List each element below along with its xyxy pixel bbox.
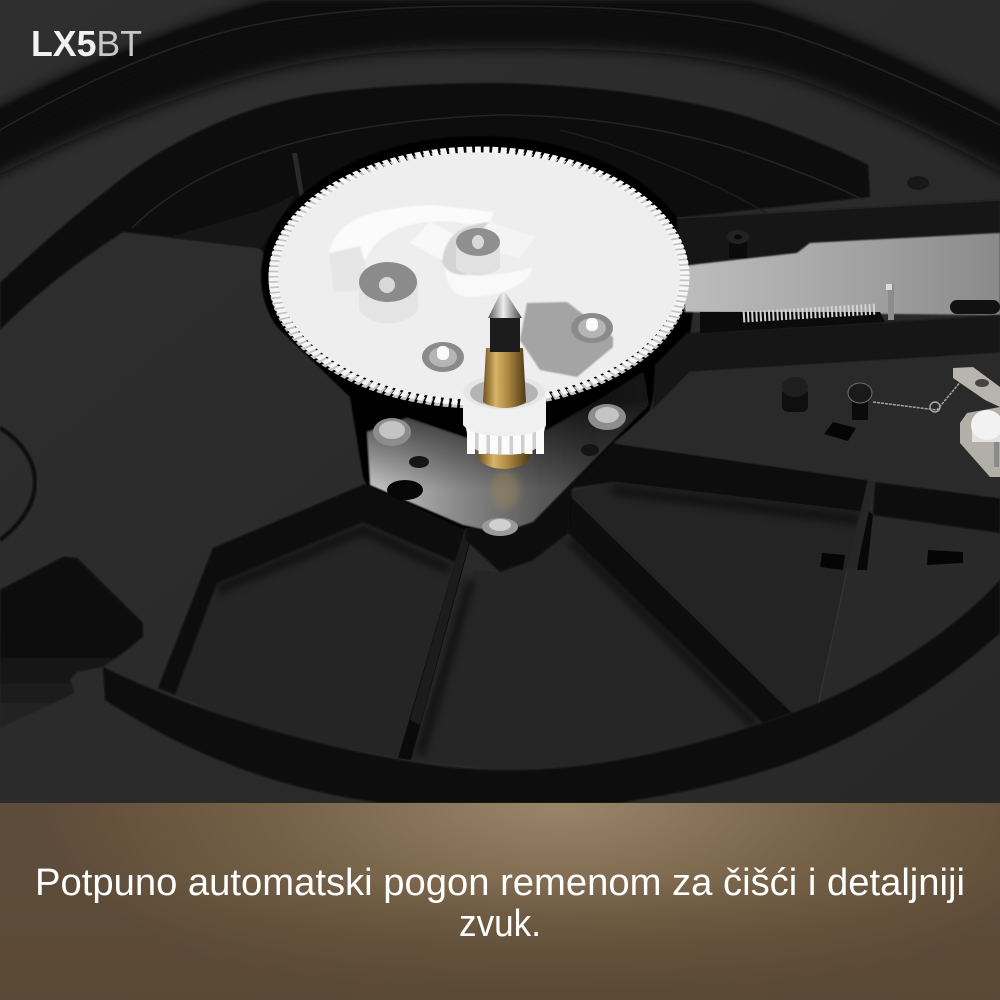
gear edge [274,153,684,405]
plate holes [387,444,599,500]
right floor panel [613,353,1000,498]
brass reflection on plate [491,470,519,510]
white cam arc [329,205,535,297]
metal tab [953,367,1000,407]
inner ring wall and well [0,83,870,330]
right mechanism parts [782,367,1000,477]
brass shaft [483,348,526,408]
metal mounting plate [367,373,648,536]
round boss outline at left edge [0,428,35,540]
diagonal rib [568,492,793,723]
steel tip [488,292,522,318]
left collar stud [422,342,464,372]
small post with wire [848,368,972,420]
upper right wall [677,200,1000,270]
black shaft [490,316,520,352]
gear teeth [274,150,684,402]
gold gradient background [0,803,1000,1000]
gear face [278,152,680,400]
lower right wall [652,315,1000,412]
pinion collar back [463,375,545,411]
large white gear [274,150,684,405]
small screw post on upper wall [727,230,749,258]
small floor slots [820,550,963,570]
bottom ring wall [103,580,1000,803]
left notch recess [0,557,143,728]
dome on gutter floor [907,176,929,190]
plate screws [373,404,626,536]
square slot [824,422,856,441]
spindle and pinion [463,292,546,469]
right floor walls [572,443,1000,710]
left screw boss [359,262,418,324]
caption text: Potpuno automatski pogon remenom za čišći i detaljniji [35,862,965,904]
upper screw boss [456,228,500,276]
white knob on lever [960,407,1000,477]
floor sections between ribs [175,482,862,770]
pinion teeth [465,425,546,455]
caption band [0,803,1000,1000]
black peg [782,377,808,412]
recess around gear [261,136,697,542]
metal bracket on gear [520,302,613,377]
caption text: zvuk. [459,903,541,945]
hexagon floor walls [158,484,474,760]
brass lower shaft [478,441,530,469]
bright strip behind spring [682,233,1000,315]
pinion collar front [463,393,546,436]
band fade [0,880,1000,1000]
plate front wall [466,405,650,572]
tension spring [700,284,1000,333]
outer rim wall [0,2,1000,205]
right collar stud [571,313,613,343]
brand logo: LX5BT [31,23,142,64]
